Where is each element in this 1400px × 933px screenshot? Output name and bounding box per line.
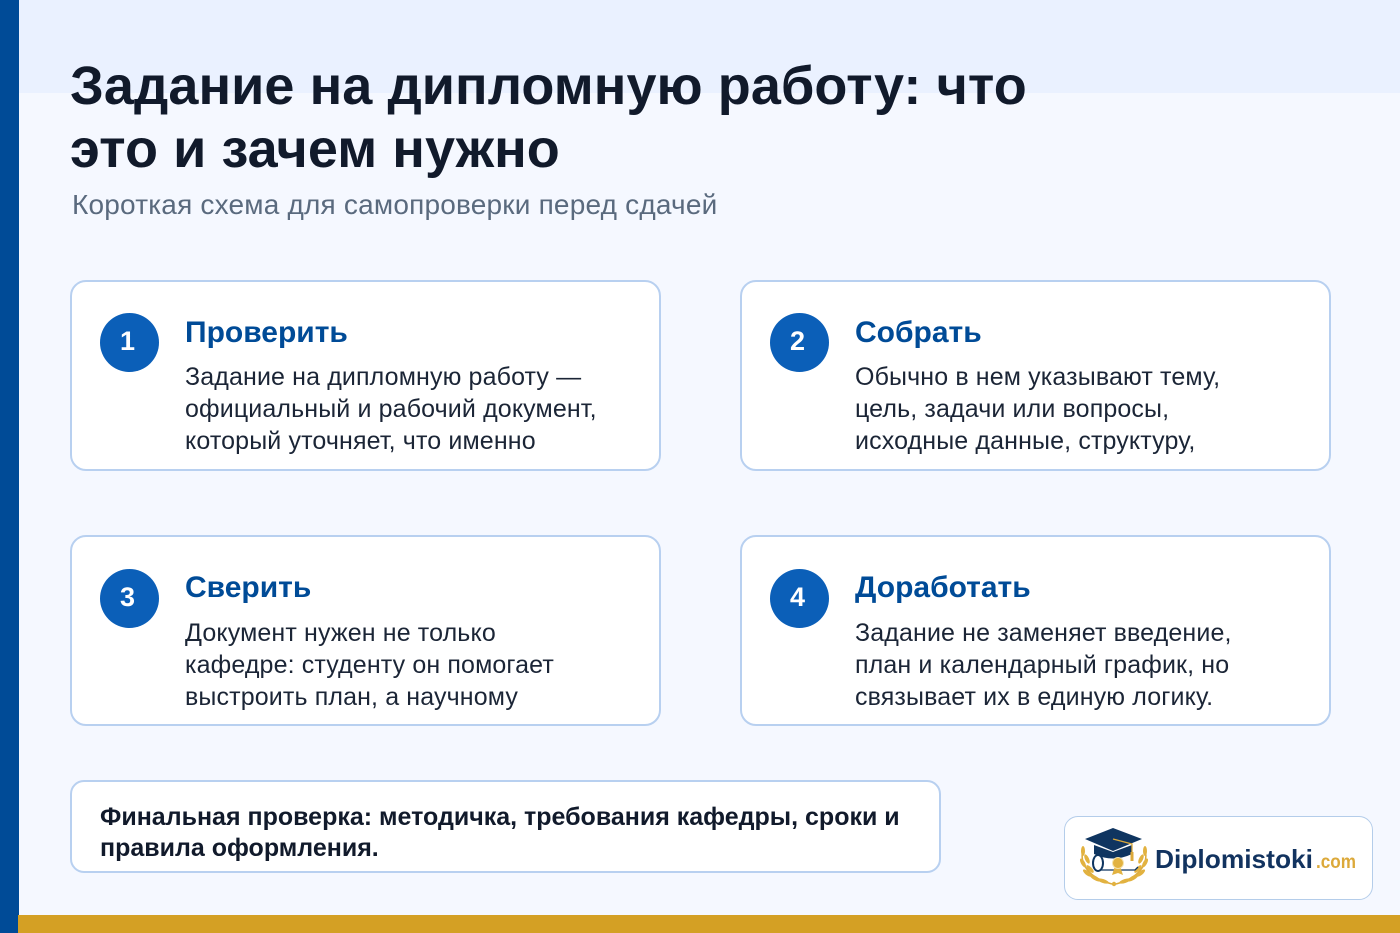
text: card 1: который уточняет, что именно [185,427,536,455]
text: card 3: выстроить план, а научному [185,683,518,711]
panel: card 1 [70,280,661,471]
callout text: правила оформления. [100,834,379,862]
number badge 4 [770,569,829,628]
heading: card 3: Сверить [185,571,311,604]
number badge 3: 3 [120,582,135,612]
logo domain: .com [1316,852,1356,873]
text: card 2: цель, задачи или вопросы, [855,395,1169,423]
title: Задание на дипломную работу: что [70,56,1027,116]
title [70,56,1027,179]
text: card 4: план и календарный график, но [855,651,1229,679]
text: card 3 [185,619,554,711]
callout text [100,803,900,862]
text: card 2: исходные данные, структуру, [855,427,1195,455]
heading: card 1: Проверить [185,316,348,349]
subtitle: Короткая схема для самопроверки перед сдачей [72,189,717,220]
logo text: Diplomistoki [1155,844,1313,874]
text: card 2 [855,363,1220,455]
text: card 3: Документ нужен не только [185,619,496,647]
callout text: Финальная проверка: методичка, требования кафедры, сроки и [100,803,900,831]
icon: graduation cap with diploma and laurel [1079,828,1149,886]
text: card 2: Обычно в нем указывают тему, [855,363,1220,391]
heading: card 2: Собрать [855,316,982,349]
number badge 1: 1 [120,326,135,356]
text: card 4: Задание не заменяет введение, [855,619,1232,647]
number badge 2 [770,313,829,372]
top band [0,0,1400,93]
text: card 1 [185,363,597,455]
text: card 1: Задание на дипломную работу — [185,363,581,391]
heading: card 4: Доработать [855,571,1031,604]
callout: final check [70,780,941,873]
left accent bar [0,0,19,933]
text: card 4 [855,619,1232,711]
text: card 1: официальный и рабочий документ, [185,395,597,423]
number badge 4: 4 [790,582,805,612]
panel: card 3 [70,535,661,726]
text: card 4: связывает их в единую логику. [855,683,1213,711]
number badge 2: 2 [790,326,805,356]
number badge 1 [100,313,159,372]
bottom gold bar [18,915,1400,933]
panel: card 4 [740,535,1331,726]
text: card 3: кафедре: студенту он помогает [185,651,554,679]
logo card [1064,816,1373,900]
title: это и зачем нужно [70,119,560,179]
number badge 3 [100,569,159,628]
panel: card 2 [740,280,1331,471]
